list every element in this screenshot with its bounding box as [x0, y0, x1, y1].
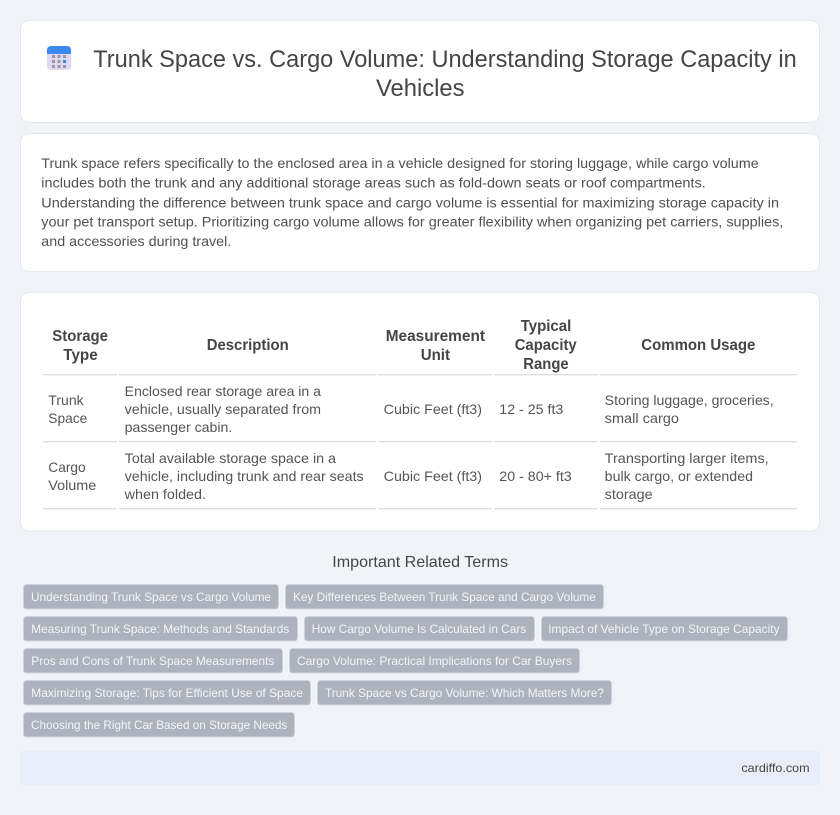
- table row: cargo volume: Cargo: [48, 459, 86, 475]
- panel: intro paragraph: Understanding the difference between trunk space and cargo volume is essential for maximizing storage capacity in: [41, 194, 779, 210]
- panel: intro paragraph: your pet transport setup. Prioritizing cargo volume allows for greater flexibility when organizing pet carriers, supplies,: [41, 214, 783, 230]
- tag: [24, 712, 294, 737]
- tag: Key Differences Between Trunk Space and Cargo Volume: [293, 590, 596, 604]
- tag: [286, 584, 604, 609]
- tag: Understanding Trunk Space vs Cargo Volume: [31, 590, 271, 604]
- table row: trunk space: Space: [48, 410, 88, 426]
- heading: important related terms: Important Related Terms: [332, 554, 508, 571]
- tag: [318, 680, 612, 705]
- table row: cargo volume: [48, 450, 769, 502]
- icon: calendar: [47, 46, 71, 70]
- tag: [542, 616, 788, 641]
- tag: [24, 584, 278, 609]
- tag: Trunk Space vs Cargo Volume: Which Matters More?: [325, 686, 604, 700]
- tag: [24, 680, 310, 705]
- tag: Pros and Cons of Trunk Space Measurements: [31, 654, 274, 668]
- table row: trunk space: Enclosed rear storage area in a: [125, 383, 321, 399]
- table header row: Typical: [521, 318, 571, 335]
- tag: Maximizing Storage: Tips for Efficient Use of Space: [31, 686, 303, 700]
- table row: trunk space: small cargo: [605, 410, 679, 426]
- title: [93, 46, 797, 102]
- table row: trunk space: Cubic Feet (ft3): [384, 401, 482, 417]
- footer: cardiffo.com: [741, 761, 810, 775]
- table header row: Measurement: [386, 328, 486, 345]
- footer: [20, 751, 820, 785]
- table row: cargo volume: 20 - 80+ ft3: [499, 468, 572, 484]
- tag: How Cargo Volume Is Calculated in Cars: [312, 622, 526, 636]
- tag: Cargo Volume: Practical Implications for Car Buyers: [297, 654, 572, 668]
- table row: trunk space: Storing luggage, groceries,: [605, 392, 774, 408]
- panel: intro paragraph: includes both the trunk and any additional storage areas such as fold-down seats or roof compartments.: [41, 174, 706, 190]
- table header row: Description: [207, 337, 289, 354]
- panel: intro paragraph: and accessories during travel.: [41, 233, 231, 249]
- table header row: [52, 318, 755, 373]
- tag: [24, 648, 282, 673]
- table row: cargo volume: Transporting larger items,: [605, 450, 769, 466]
- panel: intro paragraph: [20, 134, 820, 272]
- table row: trunk space: Trunk: [48, 392, 85, 408]
- tag: Impact of Vehicle Type on Storage Capacity: [548, 622, 780, 636]
- title: Vehicles: [376, 75, 464, 102]
- table row: trunk space: passenger cabin.: [125, 419, 232, 435]
- table row: cargo volume: vehicle, including trunk and rear seats: [125, 468, 364, 484]
- tag: [24, 616, 298, 641]
- panel: intro paragraph: Trunk space refers specifically to the enclosed area in a vehicle designed for storing luggage, while cargo volume: [41, 155, 759, 171]
- table row: cargo volume: Cubic Feet (ft3): [384, 468, 482, 484]
- table row: cargo volume: Total available storage space in a: [125, 450, 336, 466]
- panel: related term tags: [24, 584, 788, 737]
- tag: Measuring Trunk Space: Methods and Standards: [31, 622, 289, 636]
- table row: cargo volume: bulk cargo, or extended: [605, 468, 753, 484]
- table row: trunk space: 12 - 25 ft3: [499, 401, 564, 417]
- table row: cargo volume: storage: [605, 486, 653, 502]
- table header row: Type: [63, 347, 98, 364]
- tag: Choosing the Right Car Based on Storage Needs: [31, 718, 287, 732]
- table header row: Storage: [52, 328, 108, 345]
- table header row: Capacity: [515, 337, 577, 354]
- table row: trunk space: vehicle, usually separated from: [125, 401, 321, 417]
- table header row: Unit: [421, 347, 451, 364]
- table row: trunk space: [48, 383, 774, 435]
- tag: [304, 616, 534, 641]
- table header row: Range: [523, 356, 569, 373]
- panel: comparison table: [20, 292, 820, 531]
- table row: cargo volume: when folded.: [124, 486, 206, 502]
- table row: cargo volume: Volume: [48, 477, 97, 493]
- title: Trunk Space vs. Cargo Volume: Understanding Storage Capacity in: [93, 46, 797, 73]
- panel: header: [20, 20, 820, 122]
- tag: [290, 648, 580, 673]
- table header row: Common Usage: [641, 337, 755, 354]
